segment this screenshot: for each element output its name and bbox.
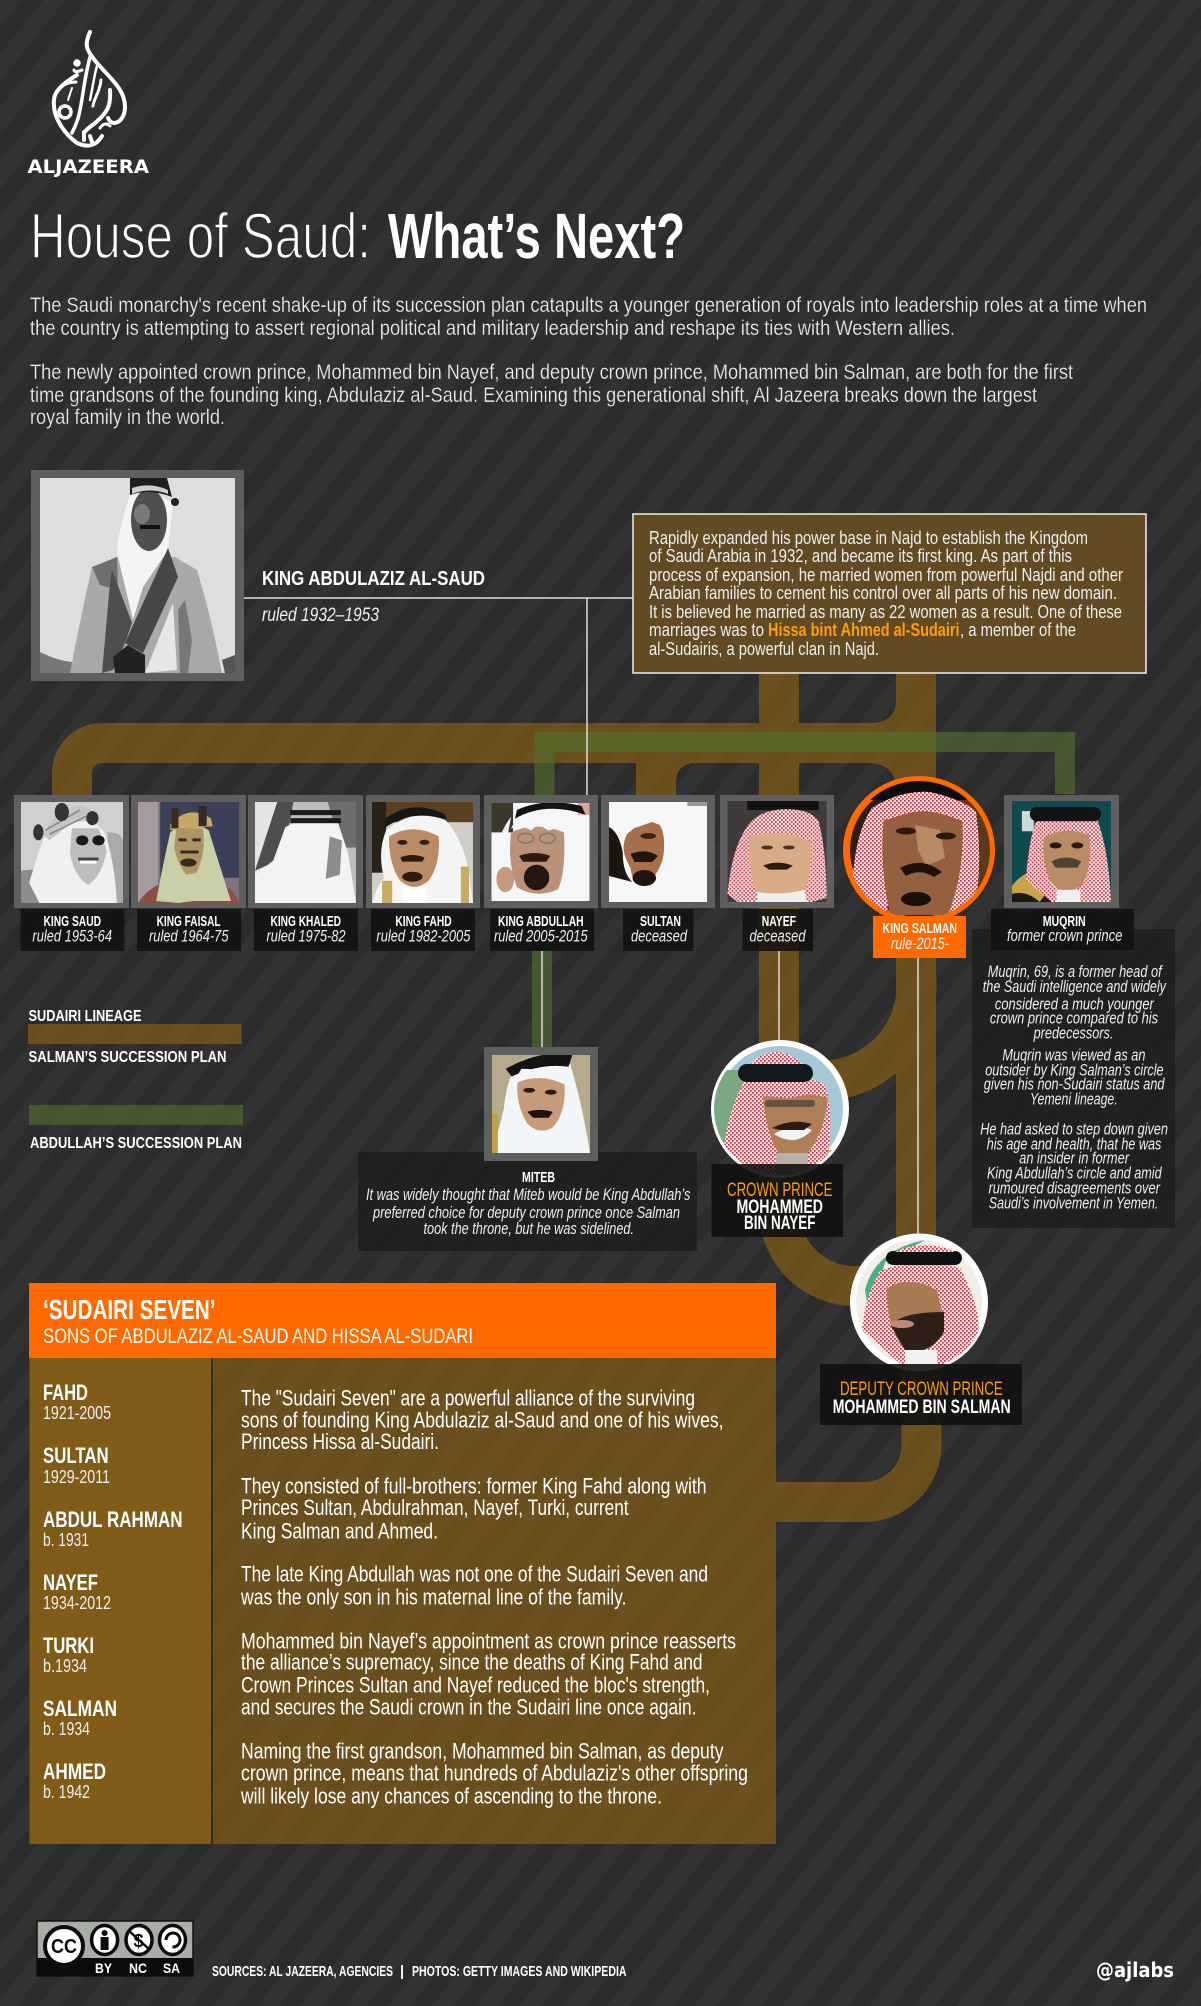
caption: Nayef: deceased xyxy=(750,926,806,946)
portrait: Deputy Crown Prince Mohammed bin Salman xyxy=(853,1236,985,1368)
legend xyxy=(28,1008,243,1152)
caption: Nayef: NAYEF xyxy=(762,914,796,930)
callout: King Abdulaziz biography: al-Sudairis, a powerful clan in Najd. xyxy=(649,638,879,659)
caption: Nayef xyxy=(743,909,813,951)
portrait: Muqrin xyxy=(1004,795,1119,908)
body text xyxy=(213,1358,776,1844)
panel: Muqrin biography xyxy=(972,929,1175,1228)
connector lines xyxy=(235,598,918,1234)
body text: The "Sudairi Seven" are a powerful alliance of the surviving xyxy=(241,1386,695,1410)
caption: King Abdullah: KING ABDULLAH xyxy=(498,914,584,930)
caption: Muqrin: MUQRIN xyxy=(1043,914,1086,930)
list of seven sons: b. 1934 xyxy=(43,1719,90,1739)
caption: King Abdullah xyxy=(490,909,594,951)
title: House of Saud: xyxy=(30,200,371,272)
caption: King Saud xyxy=(20,909,124,951)
caption: Deputy Crown Prince Mohammed bin Salman: DEPUTY CROWN PRINCE xyxy=(840,1378,1003,1400)
caption: Crown Prince Mohammed bin Nayef: BIN NAYEF xyxy=(744,1212,816,1234)
title xyxy=(30,200,685,272)
panel: Sudairi Seven xyxy=(29,1283,776,1844)
portrait: Sultan xyxy=(601,795,715,908)
portrait: King Saud xyxy=(14,795,129,908)
icon: Creative Commons badge: SA xyxy=(163,1960,180,1976)
caption: Crown Prince Mohammed bin Nayef xyxy=(712,1164,843,1237)
body text: was the only son in his maternal line of the family. xyxy=(240,1584,626,1610)
panel: Muqrin biography: predecessors. xyxy=(1033,1024,1113,1043)
caption: Deputy Crown Prince Mohammed bin Salman xyxy=(820,1364,1022,1425)
legend: ABDULLAH’S SUCCESSION PLAN xyxy=(30,1135,242,1152)
callout: King Abdulaziz biography: , a member of the xyxy=(960,619,1076,640)
logo wordmark: ALJAZEERA xyxy=(28,156,149,178)
intro text xyxy=(30,293,1147,429)
list of seven sons xyxy=(30,1358,211,1844)
caption: King Salman: KING SALMAN xyxy=(882,921,957,937)
caption: King Fahd xyxy=(371,909,475,951)
list of seven sons: 1929-2011 xyxy=(43,1467,110,1487)
handle: @ajlabs xyxy=(1096,1958,1174,1982)
caption: King Abdullah: ruled 2005-2015 xyxy=(494,926,588,946)
caption: King Faisal: ruled 1964-75 xyxy=(149,926,229,946)
caption: King Saud: ruled 1953-64 xyxy=(32,926,112,946)
list of seven sons: 1921-2005 xyxy=(43,1403,111,1423)
caption: King Saud: KING SAUD xyxy=(44,914,101,930)
body text: King Salman and Ahmed. xyxy=(241,1518,438,1544)
list of seven sons: FAHD xyxy=(43,1380,88,1405)
caption: Crown Prince Mohammed bin Nayef: MOHAMMED xyxy=(736,1196,823,1218)
list of seven sons: 1934-2012 xyxy=(43,1593,111,1613)
body text: the alliance’s supremacy, since the deaths of King Fahd and xyxy=(241,1650,703,1674)
body text: Mohammed bin Nayef’s appointment as crown prince reasserts xyxy=(241,1628,736,1654)
icon: Creative Commons badge xyxy=(37,1921,193,1976)
caption: Muqrin: former crown prince xyxy=(1007,926,1122,945)
caption: King Faisal xyxy=(137,909,241,951)
caption: Muqrin xyxy=(991,909,1134,950)
panel: Muqrin biography: Yemeni lineage. xyxy=(1030,1090,1118,1109)
body text: will likely lose any chances of ascending to the throne. xyxy=(240,1784,662,1808)
panel header: SONS OF ABDULAZIZ AL-SAUD AND HISSA AL-SUDARI xyxy=(43,1324,473,1348)
callout: King Abdulaziz biography: of Saudi Arabia in 1932, and became its first king. As part of this xyxy=(649,545,1072,566)
panel: Miteb: preferred choice for deputy crown prince once Salman xyxy=(372,1203,680,1222)
legend: SALMAN’S SUCCESSION PLAN xyxy=(28,1049,226,1066)
panel: Miteb xyxy=(358,1152,697,1251)
body text: They consisted of full-brothers: former King Fahd along with xyxy=(241,1474,707,1498)
list of seven sons: b. 1942 xyxy=(43,1782,90,1802)
caption: King Salman xyxy=(873,916,966,958)
list of seven sons: SULTAN xyxy=(43,1443,109,1468)
sources: | xyxy=(400,1964,404,1980)
callout: King Abdulaziz biography: marriages was to xyxy=(649,619,764,640)
panel: Miteb: It was widely thought that Miteb would be King Abdullah’s xyxy=(366,1185,691,1204)
brown Sudairi lineage lines xyxy=(72,673,922,1502)
panel: Muqrin biography: considered a much younger xyxy=(995,995,1155,1014)
caption: King Salman: rule-2015- xyxy=(891,934,949,953)
icon: Creative Commons badge: NC xyxy=(129,1960,147,1976)
caption: Sultan xyxy=(623,909,694,951)
panel header: ‘SUDAIRI SEVEN’ xyxy=(43,1294,216,1325)
body text: Princes Sultan, Abdulrahman, Nayef, Turki, current xyxy=(241,1495,629,1520)
green Abdullah succession lines xyxy=(542,742,1065,1047)
caption: King Fahd: KING FAHD xyxy=(395,914,452,930)
portrait: Nayef xyxy=(720,795,834,908)
body text: and secures the Saudi crown in the Sudairi line once again. xyxy=(241,1694,696,1720)
legend: SUDAIRI LINEAGE xyxy=(28,1008,142,1025)
icon: Creative Commons badge: CC xyxy=(51,1936,77,1958)
caption: King Khaled: ruled 1975-82 xyxy=(266,926,346,946)
portrait: Miteb xyxy=(484,1047,598,1161)
portrait: King Faisal xyxy=(131,795,246,908)
panel: Muqrin biography: an insider in former xyxy=(1019,1149,1130,1168)
intro text: the country is attempting to assert regional political and military leadership and reshape its ties with Western allies. xyxy=(30,316,955,340)
caption: King Fahd: ruled 1982-2005 xyxy=(376,926,471,946)
caption: King Khaled xyxy=(254,909,358,951)
caption: King Khaled: KING KHALED xyxy=(270,914,341,930)
caption: King Faisal: KING FAISAL xyxy=(157,914,221,930)
portrait: King Abdulaziz xyxy=(31,470,244,681)
intro text: royal family in the world. xyxy=(30,405,225,429)
body text: sons of founding King Abdulaziz al-Saud and one of his wives, xyxy=(241,1408,724,1432)
list of seven sons: TURKI xyxy=(43,1633,94,1658)
sources: PHOTOS: GETTY IMAGES AND WIKIPEDIA xyxy=(412,1964,627,1980)
sources xyxy=(212,1964,627,1980)
label: ruled 1932-1953: ruled 1932–1953 xyxy=(262,605,379,626)
body text: The late King Abdullah was not one of the Sudairi Seven and xyxy=(241,1562,708,1586)
list of seven sons: ABDUL RAHMAN xyxy=(43,1507,183,1532)
icon: Creative Commons badge: $ xyxy=(134,1931,144,1951)
caption: Crown Prince Mohammed bin Nayef: CROWN PRINCE xyxy=(727,1179,832,1201)
list of seven sons: NAYEF xyxy=(43,1570,98,1595)
icon: Creative Commons badge: BY xyxy=(95,1960,113,1976)
portrait: King Fahd xyxy=(366,795,480,908)
icon: Al Jazeera calligraphic logo xyxy=(54,32,125,146)
list of seven sons: SALMAN xyxy=(43,1696,117,1721)
portrait: Crown Prince Mohammed bin Nayef xyxy=(714,1043,846,1180)
list of seven sons: b.1934 xyxy=(43,1656,87,1676)
callout: King Abdulaziz biography: Hissa bint Ahmed al-Sudairi xyxy=(768,619,960,640)
label: King Abdulaziz: KING ABDULAZIZ AL-SAUD xyxy=(262,567,485,590)
callout: King Abdulaziz biography: Rapidly expanded his power base in Najd to establish the Kingdom xyxy=(649,527,1088,548)
intro text: time grandsons of the founding king, Abdulaziz al-Saud. Examining this generational shift, Al Jazeera breaks down the largest xyxy=(30,383,1037,407)
body text: Princess Hissa al-Sudairi. xyxy=(241,1429,439,1454)
portrait: King Salman xyxy=(846,779,995,925)
portrait: King Abdullah xyxy=(484,795,598,908)
panel header xyxy=(29,1283,776,1358)
caption: Deputy Crown Prince Mohammed bin Salman: MOHAMMED BIN SALMAN xyxy=(833,1396,1011,1418)
portrait: King Khaled xyxy=(248,795,363,908)
caption: Sultan: deceased xyxy=(631,926,687,946)
sources: SOURCES: AL JAZEERA, AGENCIES xyxy=(212,1964,393,1980)
panel: Miteb: took the throne, but he was sidelined. xyxy=(424,1219,634,1238)
body text: crown prince, means that hundreds of Abdulaziz's other offspring xyxy=(241,1760,748,1786)
panel: Miteb: MITEB xyxy=(522,1170,555,1186)
body text: Naming the first grandson, Mohammed bin Salman, as deputy xyxy=(241,1738,724,1764)
callout: King Abdulaziz biography xyxy=(633,514,1146,673)
list of seven sons: AHMED xyxy=(43,1759,106,1784)
caption: Sultan: SULTAN xyxy=(640,914,681,930)
title: What’s Next? xyxy=(388,200,685,272)
body text: Crown Princes Sultan and Nayef reduced the bloc's strength, xyxy=(241,1672,710,1698)
list of seven sons: b. 1931 xyxy=(43,1530,89,1550)
panel: Muqrin biography: Muqrin was viewed as an xyxy=(1002,1045,1146,1064)
